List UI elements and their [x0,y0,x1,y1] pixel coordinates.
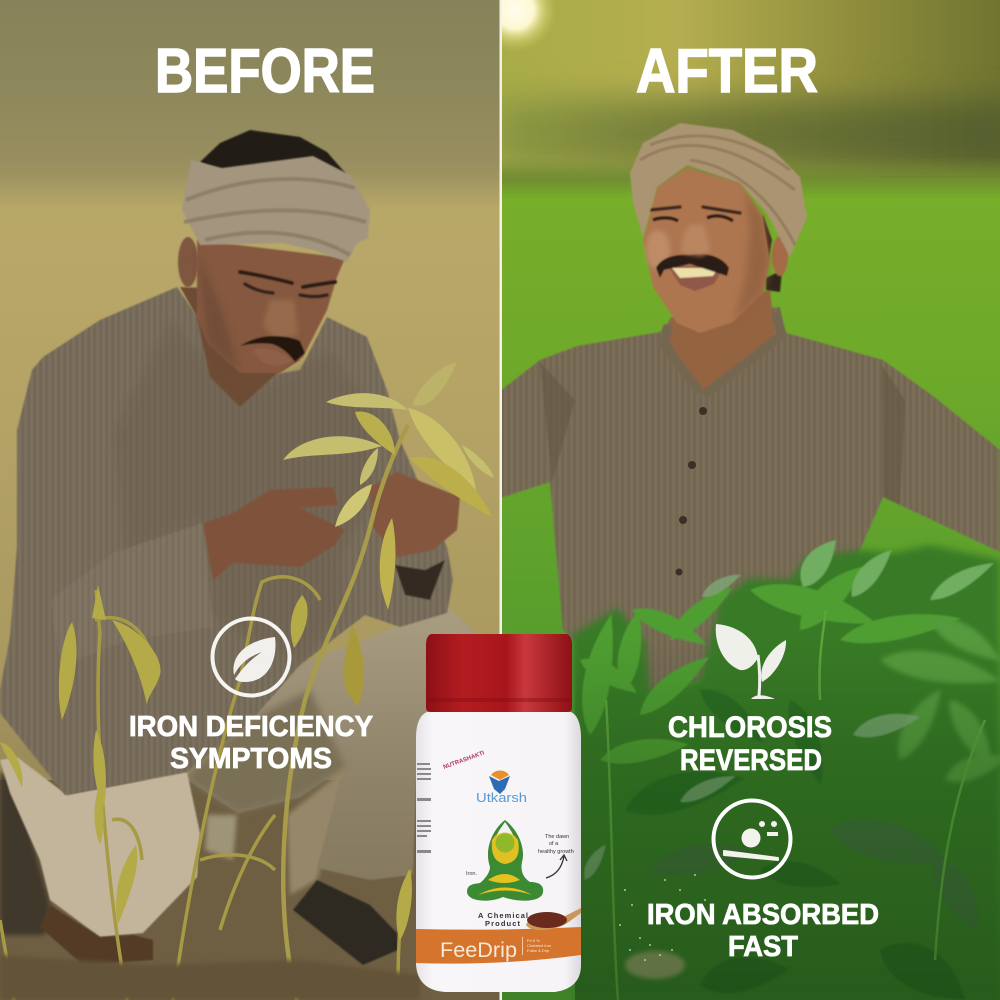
boot-top cloth [205,815,237,860]
band divider [522,937,523,955]
icon: sprout [716,624,786,699]
band fine print: Chelated Iron [527,943,551,948]
farmer turban [182,156,370,262]
sun glow [502,0,552,48]
highlight leaves [579,568,922,882]
product bottle: of a [549,841,559,847]
label: iron absorbed fast [647,899,879,963]
band fine print [527,938,551,953]
drooping yellow leaves [0,585,412,940]
bottle body [416,712,581,992]
bottle cap [426,634,572,712]
FeeDrip name: FeeDrip [440,939,517,962]
A Chemical Product: A Chemical [478,911,528,920]
neck [668,290,775,392]
tree line [490,100,1000,170]
yoga figure [467,820,543,901]
label: iron deficiency symptoms: SYMPTOMS [170,743,332,775]
leaf stems [606,610,985,1000]
band fine print: Fe 6 % [527,938,540,943]
smiling farmer shirt [500,307,1000,697]
bottom soil texture [0,955,420,1000]
cuff interior [395,560,445,600]
Utkarsh logo flower [489,770,510,794]
soil ground [0,780,500,1000]
icon: absorption in circle [714,800,790,878]
label: iron absorbed fast: IRON ABSORBED [647,899,879,931]
shaded thigh [185,690,345,813]
label: chlorosis reversed: REVERSED [680,744,822,777]
yellowing plant held by farmer [283,362,494,1000]
label: iron absorbed fast: FAST [728,931,798,963]
bottle tag: nutraceut: NUTRASHAKTI [443,750,486,771]
farmer ear [178,237,198,287]
dark overlay behind labels [575,640,1000,1000]
farmer sandals [40,880,398,965]
leaves: bright upper [575,555,963,769]
drooping plants [0,577,410,1000]
iron powder spoon [526,908,581,930]
sparkle dust [619,874,706,979]
cap lower shadow [426,698,572,702]
A Chemical Product: Product [485,919,520,928]
shirt torso shade [284,361,304,372]
small word: Iron. [466,871,477,877]
label: iron deficiency symptoms [129,711,373,775]
product bottle [416,634,581,992]
green field background [502,178,1000,1000]
panel: before photo [0,0,500,1000]
foliage mass [572,545,1000,1000]
panel: after photo [473,0,1000,1000]
shadow behind left leg [0,770,50,935]
Utkarsh wordmark: Utkarsh [476,790,527,805]
farmer neck [180,287,300,407]
farmer face [197,240,345,373]
orange label band [416,927,581,964]
heading: after: AFTER [636,37,818,106]
leaves: pale upper [800,540,994,600]
farmer hair [200,129,346,174]
turban [630,123,807,257]
farmer front leg [0,757,200,937]
product bottle: healthy growth [538,849,574,855]
label: chlorosis reversed: CHLOROSIS [668,711,832,744]
leaves: gray green large [647,808,992,937]
field background [0,0,500,780]
band fine print: Foliar & Drip [527,948,550,953]
A Chemical Product [478,911,528,928]
handwritten note: The dawn [545,834,569,840]
label: iron deficiency symptoms: IRON DEFICIENCY [129,711,373,743]
collar [664,312,782,395]
leaves: mid-level [619,679,978,1000]
farmer back leg [185,605,478,880]
sky [502,0,1000,180]
smiling face [643,168,770,333]
ear and hair [762,215,789,293]
center divider [500,0,502,1000]
label: chlorosis reversed [668,711,832,777]
farmer hands and cuff [126,472,460,616]
lit soil between legs [287,767,347,895]
farmer shirt [0,287,453,795]
heading: before: BEFORE [155,37,375,106]
icon: leaf in circle [212,618,290,696]
shirt buttons [676,407,707,576]
arrow on bottle [546,855,567,878]
field edge soft blur [480,168,1000,188]
leaves: right far [878,608,1000,788]
side text lines [417,763,431,853]
